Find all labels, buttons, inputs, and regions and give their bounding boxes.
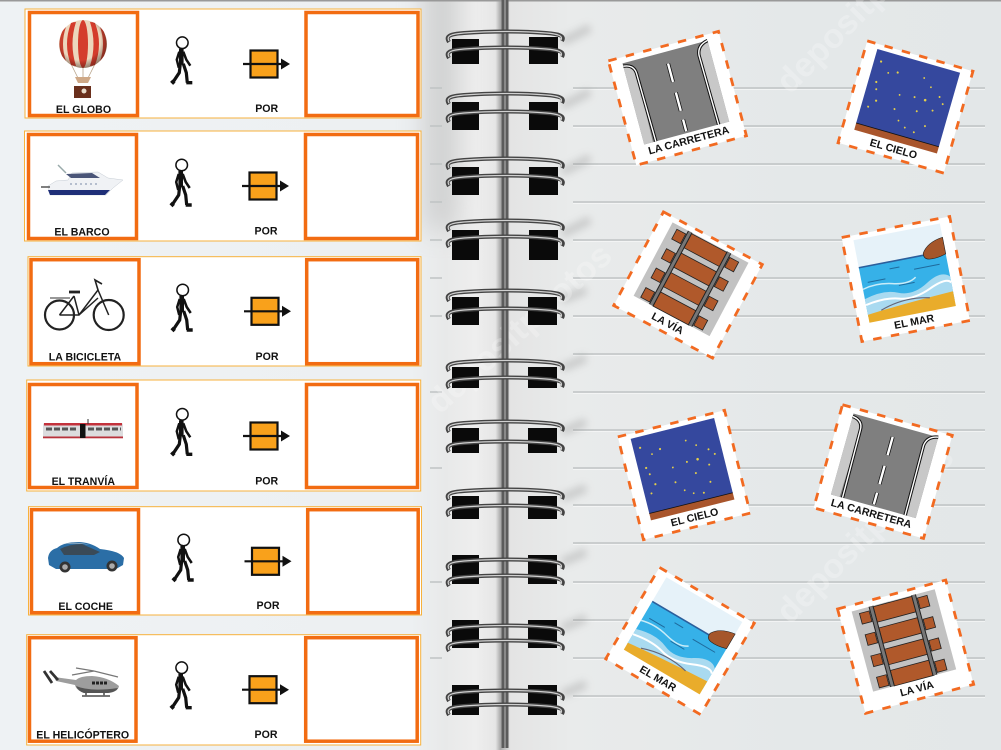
row: el helicóptero (27, 635, 421, 745)
card: la carretera (top): LA CARRETERA (647, 124, 731, 157)
label: por: POR (256, 351, 279, 363)
card: la vía (bottom) (838, 580, 974, 713)
icon: por pictogram (243, 50, 290, 78)
row: el barco (24, 131, 421, 241)
card: la carretera (bottom): LA CARRETERA (829, 497, 913, 531)
notebook spiral binding (448, 0, 563, 748)
label: por: POR (257, 600, 280, 612)
label: el globo: EL GLOBO (56, 104, 111, 116)
icon: boat (41, 165, 123, 195)
icon: por pictogram (242, 172, 289, 200)
card: el mar (bottom) (606, 567, 754, 715)
label: la bicicleta: LA BICICLETA (49, 351, 122, 363)
card: la carretera (top) (608, 31, 746, 165)
icon: car (48, 542, 124, 572)
label: por: POR (255, 103, 279, 115)
card: la vía (bottom): LA VÍA (899, 678, 935, 699)
watermark text: depositphotos (769, 438, 961, 631)
icon: person walking (173, 534, 194, 581)
label: el helicóptero: EL HELICÓPTERO (36, 729, 129, 742)
label: el barco: EL BARCO (54, 226, 110, 238)
card: el cielo (bottom) (618, 410, 750, 540)
label: por: POR (255, 476, 279, 488)
row: el tranvía (27, 380, 421, 491)
card: el cielo (top): EL CIELO (868, 137, 918, 162)
row: el coche (28, 507, 422, 615)
icon: person walking (172, 284, 193, 331)
label: el tranvía: EL TRANVÍA (52, 475, 115, 488)
icon: person walking (171, 408, 192, 455)
icon: person walking (171, 662, 192, 709)
card: la carretera (bottom) (814, 405, 952, 538)
card: el cielo (top) (838, 41, 973, 173)
watermark text: depositphotos (420, 236, 619, 421)
row: la bicicleta (28, 257, 421, 366)
icon: person walking (171, 37, 192, 84)
icon: por pictogram (243, 422, 290, 450)
card: el mar (bottom): EL MAR (637, 663, 678, 695)
icon: bicycle (45, 280, 124, 330)
watermark text (420, 0, 961, 631)
icon: por pictogram (242, 676, 289, 703)
card: el mar (top): EL MAR (893, 312, 936, 332)
icon: helicopter (44, 668, 119, 696)
card: la vía (top): LA VÍA (649, 310, 686, 337)
row: el globo (25, 9, 421, 118)
label: por: POR (255, 729, 278, 741)
icon: por pictogram (244, 548, 292, 575)
label: el coche: EL COCHE (58, 601, 113, 613)
card: la vía (top) (614, 212, 762, 358)
icon: tram (43, 419, 123, 438)
icon: person walking (171, 159, 192, 206)
icon: hot air balloon (59, 20, 107, 98)
card: el cielo (bottom): EL CIELO (670, 506, 720, 529)
label: por: POR (255, 226, 278, 238)
card: el mar (top) (842, 216, 970, 342)
icon: por pictogram (244, 298, 291, 325)
